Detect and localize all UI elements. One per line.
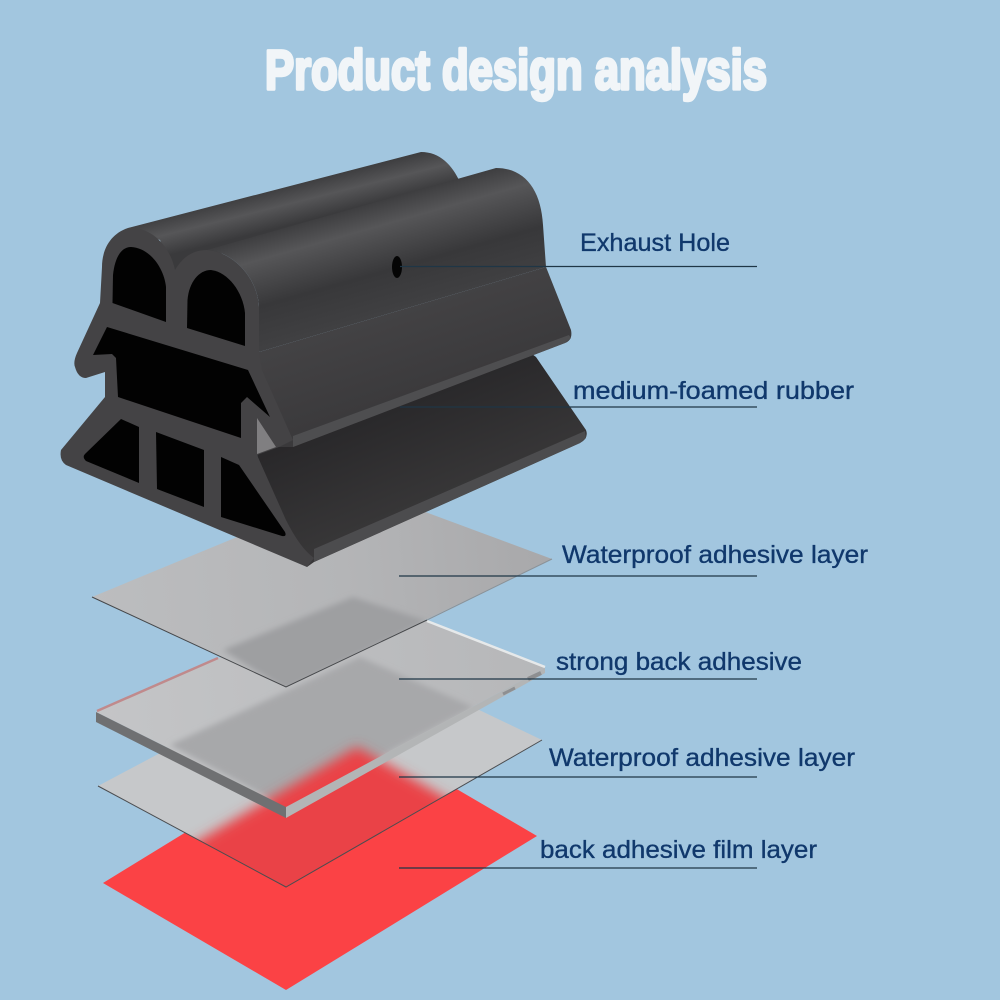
leader line: medium-foamed rubber xyxy=(400,406,757,408)
lower extruded surface xyxy=(257,345,587,567)
label: waterproof adhesive layer lower: Waterproof adhesive layer xyxy=(549,744,855,772)
layer: upper waterproof adhesive sheet xyxy=(92,512,552,688)
hole: bottom right xyxy=(221,457,286,536)
layer: strong back adhesive top face xyxy=(96,620,545,807)
lower rim highlight xyxy=(314,431,586,562)
hole: upper right arch xyxy=(187,270,245,346)
title: Product design analysis xyxy=(265,38,767,101)
hole: upper left arch xyxy=(112,247,166,322)
front face xyxy=(61,228,314,567)
back lobe surface xyxy=(128,152,460,278)
front lobe surface xyxy=(207,168,546,352)
label: exhaust hole: Exhaust Hole xyxy=(580,229,730,257)
rubber seal extrusion xyxy=(61,152,587,567)
leader line: waterproof adhesive layer lower xyxy=(399,776,757,778)
layer: lower waterproof adhesive sheet xyxy=(98,650,542,887)
infographic xyxy=(60,46,868,990)
red showing through transparent sheets xyxy=(191,741,452,886)
hole: middle chamber xyxy=(93,327,270,438)
strong back adhesive side edges xyxy=(96,621,545,818)
label: back adhesive film layer: back adhesive film layer xyxy=(540,836,817,864)
leader line: waterproof adhesive layer upper xyxy=(399,575,757,577)
middle block surface xyxy=(254,267,571,447)
label: strong back adhesive: strong back adhesive xyxy=(556,648,802,676)
leader line: exhaust hole xyxy=(400,266,757,268)
label: medium-foamed rubber: medium-foamed rubber xyxy=(573,377,854,405)
middle rim highlight xyxy=(293,335,571,447)
darker overlap on strong back adhesive xyxy=(170,657,473,807)
grey notch xyxy=(257,418,276,454)
icon: exhaust hole xyxy=(392,256,402,278)
leader line: back adhesive film xyxy=(399,867,757,869)
hole: bottom left xyxy=(84,419,139,483)
leader line: strong back adhesive xyxy=(399,678,757,680)
label: waterproof adhesive layer upper: Waterproof adhesive layer xyxy=(562,541,868,569)
layer: red back adhesive film xyxy=(103,729,537,990)
lower sheet edges xyxy=(98,740,542,887)
hole: bottom centre xyxy=(156,432,204,507)
